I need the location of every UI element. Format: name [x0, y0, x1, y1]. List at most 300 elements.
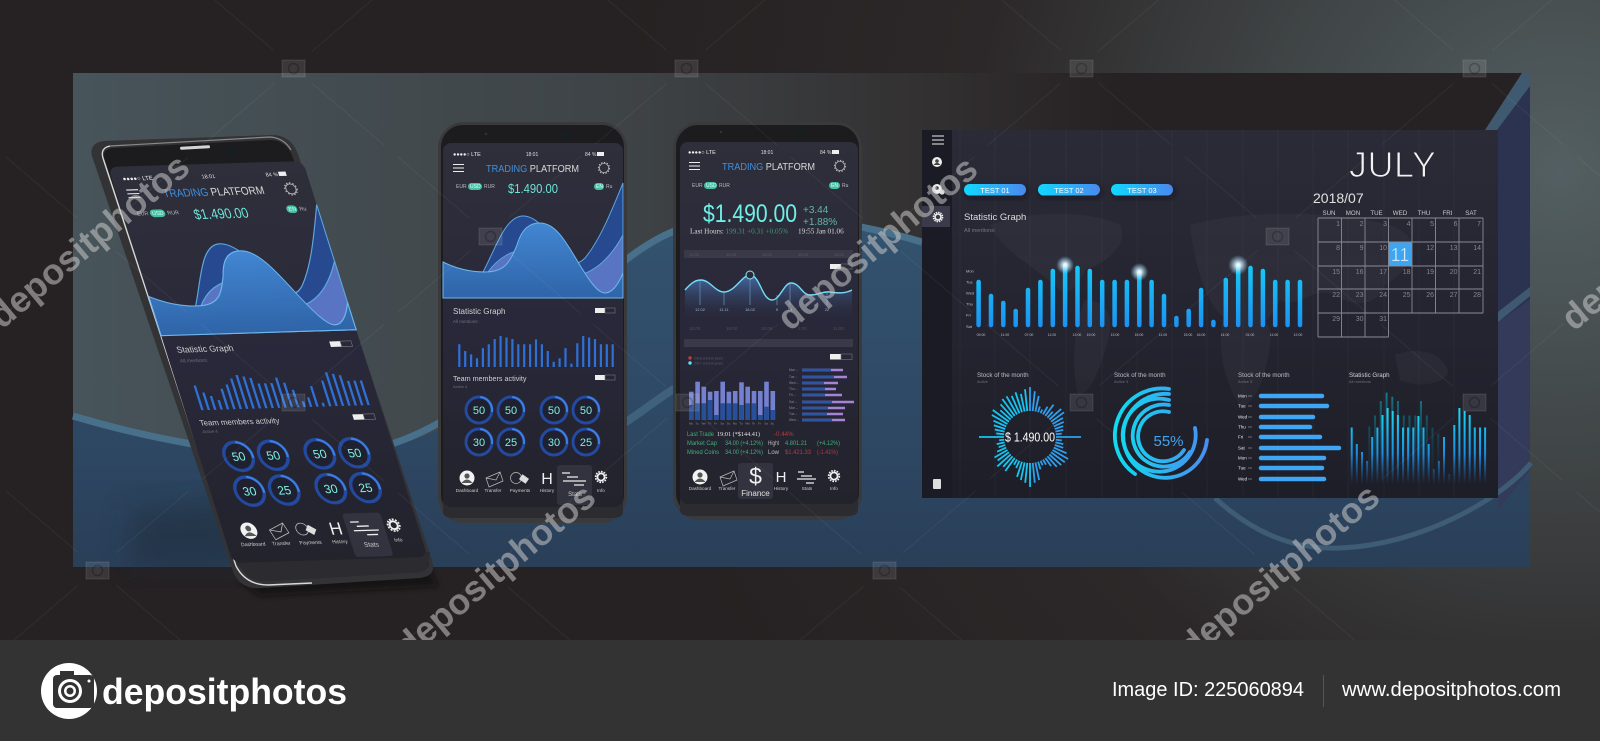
calendar dates: 15 [1332, 269, 1340, 276]
phone 1 top edge [110, 137, 291, 150]
ring values: 50 [265, 449, 282, 463]
market data table: 4.801.21 [785, 440, 808, 447]
ring values: 50 [473, 405, 485, 417]
status bar: 84 % [585, 152, 597, 158]
currency selector [456, 183, 495, 190]
time axis [977, 333, 1302, 337]
time axis: 14:00 [1221, 333, 1229, 337]
calendar dates: 6 [1454, 221, 1458, 228]
highlighted day [1388, 242, 1412, 266]
calendar dates: 7 [1477, 221, 1481, 228]
nav labels: Info [830, 486, 838, 491]
calendar dates: 4 [1407, 221, 1411, 228]
stacked bar chart: Fr [714, 422, 717, 426]
phone 3 chin [680, 498, 858, 516]
stats tab box [342, 512, 394, 557]
toggle [830, 264, 852, 269]
calendar dates: 27 [1450, 292, 1458, 299]
ring values: 50 [580, 405, 592, 417]
stacked bar chart: Fr [758, 422, 761, 426]
depositphotos watermarks [0, 145, 1600, 666]
ring values: 25 [580, 437, 592, 449]
calendar dates: 23 [1356, 292, 1364, 299]
bottom navigation [456, 465, 606, 505]
weekdays: SAT [1465, 210, 1477, 217]
time axis: 13:00 [1111, 333, 1119, 337]
ring values: 25 [505, 437, 517, 449]
horizontal bar chart: Mon -- [789, 368, 798, 372]
statistic heading [964, 212, 1026, 234]
nav labels [240, 537, 405, 553]
time axis: 12:00 [1294, 333, 1302, 337]
stacked bar chart: Sa [720, 422, 724, 426]
year and month: 2018/07 [1313, 190, 1364, 206]
stock widget 3 heading: Stock of the month [1238, 372, 1290, 379]
status bar: 84 % [820, 150, 832, 156]
statistic heading: All mentions: [179, 358, 209, 364]
depositphotos watermarks: depositphotos [1171, 475, 1387, 666]
phone 1 speaker [180, 145, 210, 150]
hamburger icon [126, 190, 141, 198]
market data table: -0.44% [774, 431, 794, 438]
gear icon [598, 162, 610, 174]
horizontal bar chart: Tue -- [789, 375, 797, 379]
currency selector [692, 182, 730, 189]
wave highlight band [73, 217, 922, 458]
radial tick chart [979, 387, 1081, 487]
calendar dates: 12 [1426, 245, 1434, 252]
stock widget 2 heading: Stock of the month [1114, 372, 1166, 379]
logo wordmark: depositphotos [102, 671, 347, 712]
concentric donut chart: 55% [1153, 433, 1184, 450]
legend: 2017 current years [694, 362, 723, 366]
team heading: Active 4 [453, 384, 468, 389]
ring values: 25 [357, 481, 375, 495]
ring values: 30 [322, 482, 340, 496]
time labels [689, 326, 844, 331]
horizontal bar chart [789, 368, 854, 422]
screen [443, 143, 623, 507]
stacked bar chart: Mo [733, 422, 737, 426]
depositphotos watermarks: depositphotos [769, 147, 985, 338]
balance: $1.490.00 [192, 206, 251, 223]
time axis: 15:00 [1184, 333, 1192, 337]
stock widget 1 heading: Active [977, 379, 989, 384]
nav labels: Stats [802, 486, 813, 491]
watermark cameras [86, 0, 1486, 579]
currency selector: RUR [719, 183, 730, 189]
line chart: 11.11 [719, 307, 729, 312]
icon: transfer [267, 523, 291, 540]
calendar [1313, 144, 1483, 337]
horizontal bar chart: Wed -- [789, 418, 799, 422]
bottom navigation [689, 463, 839, 499]
icon: stats [562, 473, 586, 485]
line chart: 18.02 [745, 307, 756, 312]
calendar dates: 24 [1379, 292, 1387, 299]
website: www.depositphotos.com [1341, 679, 1561, 701]
horizontal bar chart: Sat -- [789, 400, 797, 404]
icon: info gear [386, 519, 401, 531]
time band top: 15:00 [762, 252, 773, 257]
stacked bar chart: Th [752, 422, 756, 426]
stacked bar chart: Su [727, 422, 731, 426]
nav labels: History [774, 486, 789, 491]
header title: TRADING PLATFORM [162, 185, 266, 200]
phone 2 camera [485, 132, 567, 136]
calendar dates: 30 [1356, 316, 1364, 323]
hamburger icon [453, 164, 464, 172]
phone 2 bezel [441, 125, 624, 517]
weekday axis [966, 268, 974, 329]
calendar dates: 20 [1450, 269, 1458, 276]
header title: TRADING PLATFORM [722, 162, 815, 173]
language selector: Ru [606, 184, 613, 190]
status bar: ●●●●○ LTE [122, 175, 154, 183]
horizontal bars: Wed [1238, 476, 1248, 482]
statistic heading: Statistic Graph [453, 307, 505, 316]
stacked bar chart: Su [770, 422, 775, 426]
currency selector: USD [470, 184, 481, 190]
calendar dates: 31 [1379, 316, 1387, 323]
stacked bar chart: Tu [695, 422, 699, 426]
line chart: 12.02 [695, 307, 706, 312]
market data table: 34.00 (+4.12%) [725, 449, 763, 456]
balance: $1.490.00 [703, 200, 797, 228]
market data table: (-1.41%) [817, 449, 838, 456]
icon: finance dollar: $ [749, 463, 762, 489]
stacked bar chart [689, 382, 775, 426]
dashboard background [922, 130, 1498, 498]
ring values [230, 446, 375, 499]
currency selector: USD [706, 183, 717, 189]
weekday axis: Tue [966, 280, 974, 284]
concentric donut chart [1115, 388, 1207, 478]
nav labels: Stats [363, 542, 381, 549]
language selector: Ru [842, 183, 849, 189]
status bar: 18:01 [201, 174, 216, 180]
nav labels [456, 488, 605, 498]
phone 1: tilted mobile mockup [92, 135, 438, 596]
bar chart [192, 371, 369, 410]
gear icon [834, 160, 846, 172]
line chart: 9 [776, 307, 779, 312]
icon: payments [510, 472, 529, 484]
test buttons [964, 184, 1175, 198]
activity rings [466, 397, 599, 455]
lower wave band [610, 380, 690, 432]
diagonal corner band [1485, 73, 1530, 130]
toggle [352, 414, 376, 420]
icon: info gear [596, 472, 606, 482]
phone 1 chin [229, 552, 430, 581]
currency selector: EUR [692, 183, 703, 189]
ring values: 50 [505, 405, 517, 417]
stacked bar chart: Th [708, 422, 712, 426]
weekday axis: Thu [966, 302, 973, 306]
depositphotos watermarks: depositphotos [387, 475, 603, 666]
stat graph heading [1349, 372, 1390, 384]
phone 1 screen content [108, 161, 428, 563]
phone 2: upright mobile mockup [438, 122, 627, 523]
nav labels: Transfer [719, 486, 736, 491]
calendar dates: 1 [1336, 221, 1340, 228]
time band top: 13:00 [689, 252, 700, 257]
finance tab box [738, 463, 773, 499]
last hours row: Last Hours: 199.31 +0.31 +0.05% [690, 228, 788, 236]
screen [108, 161, 428, 563]
horizontal bars: Mon [1238, 394, 1247, 398]
team heading [453, 374, 527, 389]
nav labels: Stats [568, 492, 582, 498]
main bar chart [966, 255, 1302, 337]
time axis: 15:00 [1135, 333, 1143, 337]
status bar: 84 % [265, 172, 279, 178]
status bar: 18:01 [761, 150, 773, 156]
market data table: Market Cap [687, 440, 718, 447]
calendar dates: 21 [1473, 269, 1481, 276]
horizontal bars: Wed [1238, 414, 1248, 420]
weekday axis: Wed [966, 290, 974, 296]
calendar dates: 17 [1379, 269, 1387, 276]
calendar dates: 29 [1332, 316, 1340, 323]
footer bar [0, 640, 1600, 741]
hamburger icon [932, 136, 944, 144]
market data table: Hight [768, 440, 779, 447]
stacked bar chart: We [702, 422, 706, 426]
ring highlights [220, 438, 384, 506]
calendar dates [1332, 221, 1481, 323]
stock widget 3 heading: Active 3 [1238, 379, 1253, 384]
calendar dates: 2 [1360, 221, 1364, 228]
icon: history: H [776, 469, 786, 486]
calendar dates: 26 [1426, 292, 1434, 299]
change values [803, 205, 837, 228]
change values: +3.44 [803, 205, 829, 216]
calendar dates: 28 [1473, 292, 1481, 299]
language selector [285, 205, 308, 213]
phone 1 drop shadow [240, 570, 438, 596]
stacked bar chart: We [745, 422, 750, 426]
horizontal bars [1238, 394, 1339, 482]
phone 3: finance mobile mockup [673, 122, 862, 520]
phone 2 chin [443, 500, 623, 518]
nav labels: Transfer [271, 541, 292, 547]
icon: dashboard [692, 470, 708, 484]
status bar: ●●●●○ LTE [688, 150, 716, 156]
calendar dates: 8 [1336, 245, 1340, 252]
icon: user [932, 157, 942, 167]
radial tick chart: $ 1.490.00 [1005, 430, 1055, 444]
currency selector: EUR [456, 184, 467, 190]
legend: 2018 current years [694, 356, 723, 360]
time axis: 11:00 [1270, 333, 1278, 337]
phone 2 body [438, 122, 627, 523]
toggle [830, 354, 852, 360]
active settings tab [922, 206, 950, 227]
right column [1495, 85, 1530, 322]
stacked bar chart: Sa [764, 422, 768, 426]
statistic heading: Statistic Graph [964, 212, 1026, 223]
phone 3 body [673, 122, 862, 520]
weekdays: THU [1418, 210, 1430, 217]
sidebar [922, 130, 952, 498]
calendar dates: 16 [1356, 269, 1364, 276]
panel: desktop dashboard [922, 130, 1498, 498]
calendar dates: 14 [1473, 245, 1481, 252]
nav labels: Dashboard [456, 488, 479, 493]
image id: Image ID: 225060894 [1112, 679, 1304, 701]
calendar dates: 22 [1332, 292, 1340, 299]
horizontal bars: Tue [1238, 466, 1246, 470]
legend [688, 356, 723, 366]
nav labels: Dashboard [240, 542, 267, 548]
test buttons: TEST 02 [1054, 186, 1084, 195]
calendar dates: 13 [1450, 245, 1458, 252]
time labels: 1:00 [798, 326, 807, 331]
market data table: (+4.12%) [817, 440, 840, 447]
nav labels [689, 486, 838, 498]
currency selector: RUR [484, 184, 495, 190]
stock widget 3 heading [1238, 372, 1290, 384]
stock widget 2 heading [1114, 372, 1166, 384]
weekdays: FRI [1443, 210, 1453, 217]
phone 1 body [92, 135, 433, 588]
language selector [829, 182, 849, 189]
stat graph heading: All mentions [1349, 379, 1371, 384]
weekdays: MON [1346, 210, 1360, 217]
nav labels: Finance [741, 489, 770, 498]
watermark camera lenses [92, 64, 1480, 576]
toggle [595, 375, 615, 380]
icon: payments [294, 523, 318, 536]
horizontal bars: Mon [1238, 456, 1247, 460]
horizontal bar chart: Thu -- [789, 387, 798, 391]
test buttons: TEST 03 [1127, 186, 1157, 195]
hamburger icon [689, 162, 700, 170]
icon: history: H [541, 471, 553, 488]
horizontal bars: Sat [1238, 446, 1246, 450]
weekdays: SUN [1322, 210, 1336, 217]
calendar dates: 19 [1426, 269, 1434, 276]
icon: history: H [326, 519, 345, 539]
calendar dates: 5 [1430, 221, 1434, 228]
statistic heading: All mentions: [453, 319, 479, 324]
time band top: 15:00 [798, 252, 809, 257]
market data table: 19:01 (*$144.41) [717, 431, 760, 438]
test buttons: TEST 01 [980, 186, 1010, 195]
nav labels: Payments [510, 488, 531, 493]
area chart [443, 183, 623, 298]
status bar [122, 171, 287, 183]
header title: TRADING PLATFORM [486, 164, 579, 175]
weekdays [1322, 210, 1477, 217]
icon: info gear [829, 471, 839, 481]
nav labels: Dashboard [689, 486, 712, 491]
horizontal bars: Tue [1238, 404, 1246, 408]
statistic heading [453, 307, 505, 324]
statistic heading: All mentions: [964, 228, 996, 234]
market data table [687, 431, 840, 456]
currency selector: EUR [136, 211, 150, 217]
ring values: 30 [548, 437, 560, 449]
icon: stats [350, 521, 380, 535]
stock widget 1 heading: Stock of the month [977, 372, 1029, 379]
blue wave area [73, 217, 1530, 567]
time band top: 16:00 [834, 252, 845, 257]
time axis: 07:00 [1025, 333, 1033, 337]
weekday axis: Sat [966, 324, 973, 329]
ring values: 50 [548, 405, 560, 417]
phone 2 screen content [443, 143, 623, 507]
market data table: Low [768, 449, 780, 456]
bar chart [459, 336, 613, 367]
selected date: 11 [1391, 245, 1409, 265]
horizontal bars: Fri [1238, 434, 1243, 440]
divider [1323, 675, 1324, 707]
icon: settings gear [933, 212, 943, 222]
phone 1 bezel [104, 140, 429, 581]
fading bar chart [1352, 393, 1485, 484]
currency selector [136, 209, 180, 218]
nav labels: Info [597, 488, 605, 493]
change values: +1.88% [803, 217, 837, 228]
nav labels: History [540, 488, 555, 493]
time axis: 19:00 [1087, 333, 1095, 337]
currency selector: USD [151, 211, 165, 217]
nav labels: Payments [299, 540, 323, 546]
phone 3 bezel [676, 125, 859, 515]
horizontal bar chart: Tue -- [789, 412, 797, 416]
bottom navigation [232, 512, 409, 560]
horizontal bar chart: Mon -- [789, 406, 798, 410]
team heading: Active 4 [202, 429, 219, 434]
phone 3 screen [680, 142, 858, 504]
line chart [685, 271, 852, 317]
market data table: 34.00 (+4.12%) [725, 440, 763, 447]
time band top: 14:00 [726, 252, 737, 257]
time axis: 11:00 [1048, 333, 1056, 337]
ring values: 50 [311, 447, 329, 461]
icon: users [932, 184, 945, 195]
calendar dates: 10 [1379, 245, 1387, 252]
gear icon [283, 183, 299, 195]
nav labels: Transfer [485, 488, 502, 493]
language selector: Ru [299, 206, 307, 213]
bottom arc band [1215, 463, 1531, 548]
status bar: ●●●●○ LTE [453, 152, 481, 158]
statistic heading [175, 343, 238, 364]
activity rings [220, 438, 384, 506]
calendar dates: 25 [1403, 292, 1411, 299]
glow highlights [1056, 255, 1248, 281]
stock widget 1 heading [977, 372, 1029, 384]
phone shadow on panel [130, 500, 250, 567]
language selector: EN [831, 183, 838, 189]
logo mark [41, 663, 97, 719]
phone 1 camera [230, 149, 234, 153]
time labels: 11:00 [833, 326, 844, 331]
ring values: 30 [473, 437, 485, 449]
weekday axis: Fri [966, 312, 971, 318]
time axis: 01:00 [1246, 333, 1254, 337]
calendar grid [1318, 218, 1483, 337]
stat graph heading: Statistic Graph [1349, 372, 1390, 379]
icon: transfer [486, 472, 503, 487]
statistic heading: Statistic Graph [175, 343, 235, 355]
line chart: 19 [788, 307, 793, 312]
weekdays: WED [1393, 210, 1408, 217]
